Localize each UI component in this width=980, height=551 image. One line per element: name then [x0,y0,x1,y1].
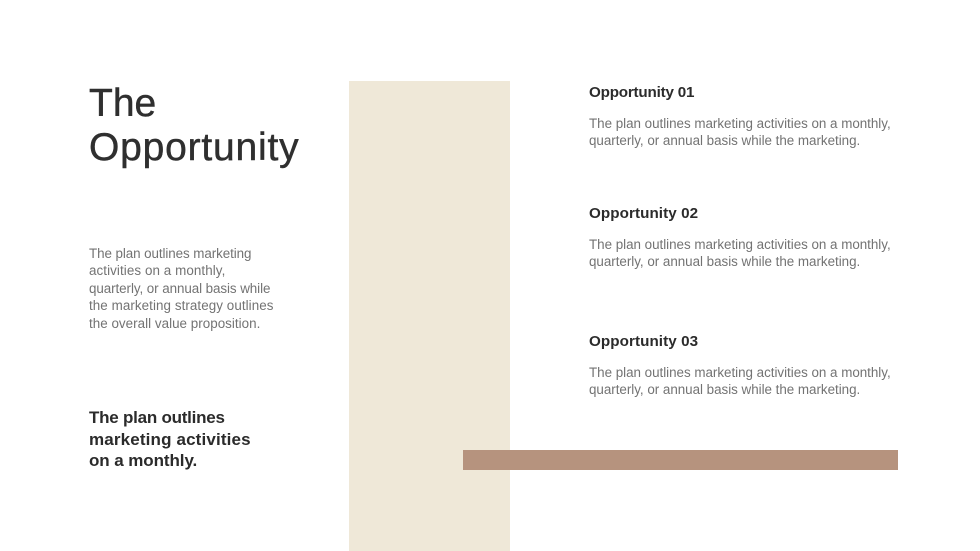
text block: emphasis [89,408,251,470]
title: The [89,82,156,124]
item: opportunity 01 [589,84,891,148]
description: opportunity 02: quarterly, or annual basis while the marketing. [589,254,860,269]
item: opportunity 02 [589,205,891,269]
description: opportunity 01: quarterly, or annual basis while the marketing. [589,133,860,148]
text block: intro: activities on a monthly, [89,263,225,278]
title: Opportunity [89,126,299,169]
item: opportunity 03 [589,333,891,397]
description: opportunity 03 [589,365,891,397]
text block: intro: The plan outlines marketing [89,246,251,261]
text block: intro: the overall value proposition. [89,316,260,331]
text block: emphasis: marketing activities [89,430,251,448]
title [89,82,299,169]
description: opportunity 02: The plan outlines marketing activities on a monthly, [589,237,891,252]
text block: intro: the marketing strategy outlines [89,298,274,313]
heading: opportunity 02: Opportunity 02 [589,205,698,222]
heading: opportunity 01: Opportunity 01 [589,84,694,101]
text block: intro: quarterly, or annual basis while [89,281,270,296]
bar: tan accent [463,450,898,470]
text block: emphasis: on a monthly. [89,451,197,470]
description: opportunity 01: The plan outlines marketing activities on a monthly, [589,116,891,131]
description: opportunity 03: quarterly, or annual basis while the marketing. [589,382,860,397]
text block: intro [89,246,274,331]
panel: beige column [348,81,510,551]
description: opportunity 03: The plan outlines marketing activities on a monthly, [589,365,891,380]
text block: emphasis: The plan outlines [89,408,225,427]
heading: opportunity 03: Opportunity 03 [589,333,698,350]
description: opportunity 02 [589,237,891,269]
description: opportunity 01 [589,116,891,148]
